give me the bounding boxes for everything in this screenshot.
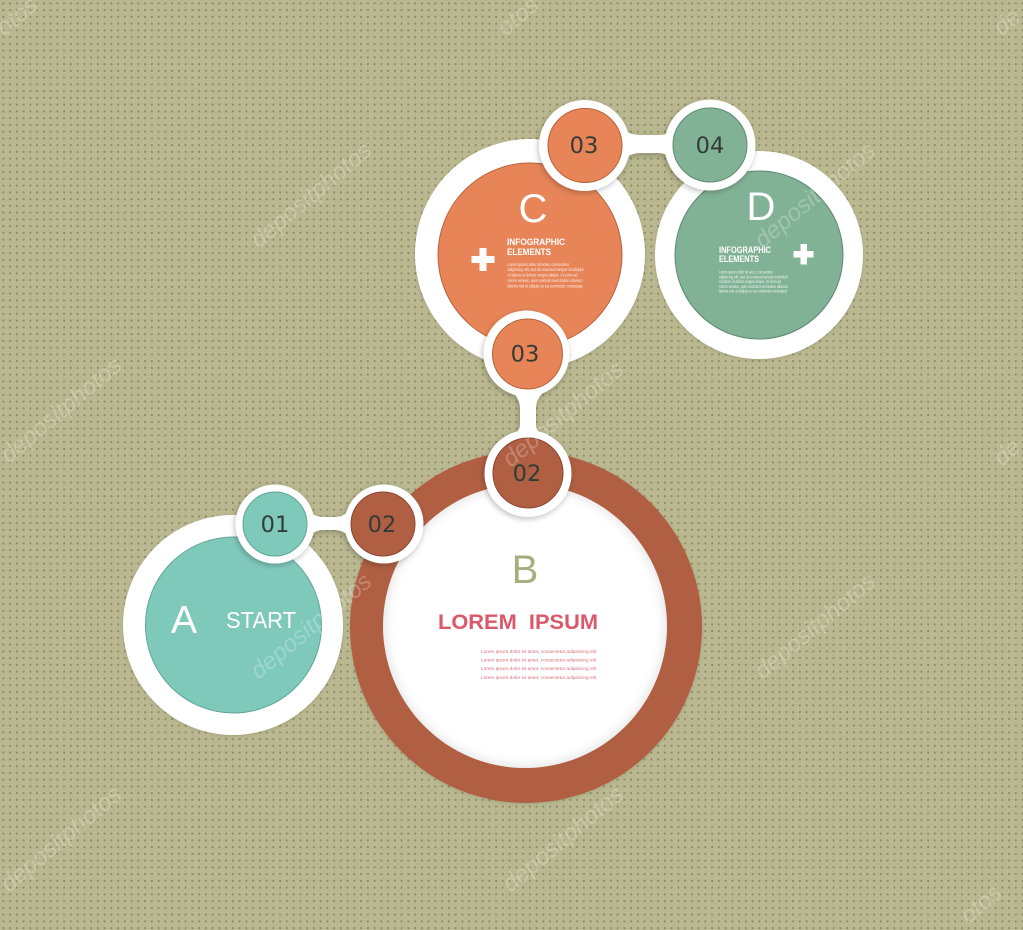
node 03 top: 03 (570, 133, 598, 159)
panel: B lorem ipsum (350, 451, 702, 803)
body text D: adipiscing elit, sed do eiusmod tempor incididunt (719, 274, 789, 280)
icon: plus C (472, 248, 494, 271)
node 01 (243, 492, 307, 556)
heading C: ELEMENTS (507, 247, 551, 257)
body text D (719, 270, 789, 294)
letter C: C (519, 187, 547, 231)
body text B: Lorem ipsum dolor sit amet, consectetur adipisicing elit (481, 658, 597, 662)
body text D: laboris nisi ut aliquip ex ea commodo consequat (719, 288, 788, 294)
heading C (507, 237, 565, 257)
body text B: Lorem ipsum dolor sit amet, consectetur adipisicing elit (481, 649, 597, 654)
body text C: Lorem ipsum dolor sit amet, consectetur (508, 262, 570, 267)
body text B: Lorem ipsum dolor sit amet, consectetur adipisicing elit (481, 666, 597, 671)
node 03 lower: 03 (511, 342, 539, 368)
heading C: INFOGRAPHIC (507, 237, 565, 247)
body text C (508, 262, 584, 288)
letter D: D (747, 185, 775, 229)
body text C: ut labore et dolore magna aliqua. Ut enim ad (508, 272, 578, 278)
node 02 upper: 02 (513, 461, 541, 487)
connector: 01 to 02 (236, 484, 424, 564)
node 03 lower (492, 319, 562, 389)
node 04 (673, 108, 747, 182)
watermarks: depositphotos (245, 568, 377, 685)
body text D: ut labore et dolore magna aliqua. Ut enim ad (719, 279, 782, 284)
letter A: A (171, 599, 197, 642)
watermarks: depositphotos (497, 356, 629, 473)
panel: D infographic elements (655, 151, 863, 359)
heading D: INFOGRAPHIC (719, 245, 771, 255)
node 03 top (548, 108, 622, 182)
body text B (481, 649, 597, 680)
watermarks: otos (955, 879, 1007, 929)
body text C: laboris nisi ut aliquip ex ea commodo consequat (508, 284, 583, 288)
connector: 03 to 04 (539, 100, 756, 191)
letter B: B (512, 548, 538, 592)
panel: A start (123, 515, 343, 735)
node 04: 04 (696, 133, 724, 159)
body text D: minim veniam, quis nostrud exercitation ullamco (719, 284, 789, 289)
icon: plus D (794, 244, 814, 264)
node 01: 01 (261, 512, 289, 538)
heading D (719, 245, 771, 264)
watermarks: depositphotos (749, 137, 881, 254)
body text B: Lorem ipsum dolor sit amet, consectetur adipisicing elit (481, 675, 597, 680)
heading D: ELEMENTS (719, 254, 759, 264)
watermarks: depositphotos (497, 781, 629, 898)
label START: START (226, 607, 296, 633)
body text C: adipiscing elit, sed do eiusmod tempor incididunt (508, 267, 584, 272)
node 02 left (351, 492, 415, 556)
node 02 left: 02 (368, 512, 396, 538)
watermarks: depositphotos (749, 568, 881, 685)
panel: C infographic elements (415, 139, 645, 369)
heading LOREM IPSUM: LOREM IPSUM (438, 610, 598, 634)
body text C: minim veniam, quis nostrud exercitation ullamco (508, 278, 583, 283)
connector: 03 to 02 (484, 310, 572, 517)
body text D: Lorem ipsum dolor sit amet, consectetur (719, 270, 773, 274)
node 02 upper (493, 438, 563, 508)
watermarks: depositphotos (245, 137, 377, 254)
